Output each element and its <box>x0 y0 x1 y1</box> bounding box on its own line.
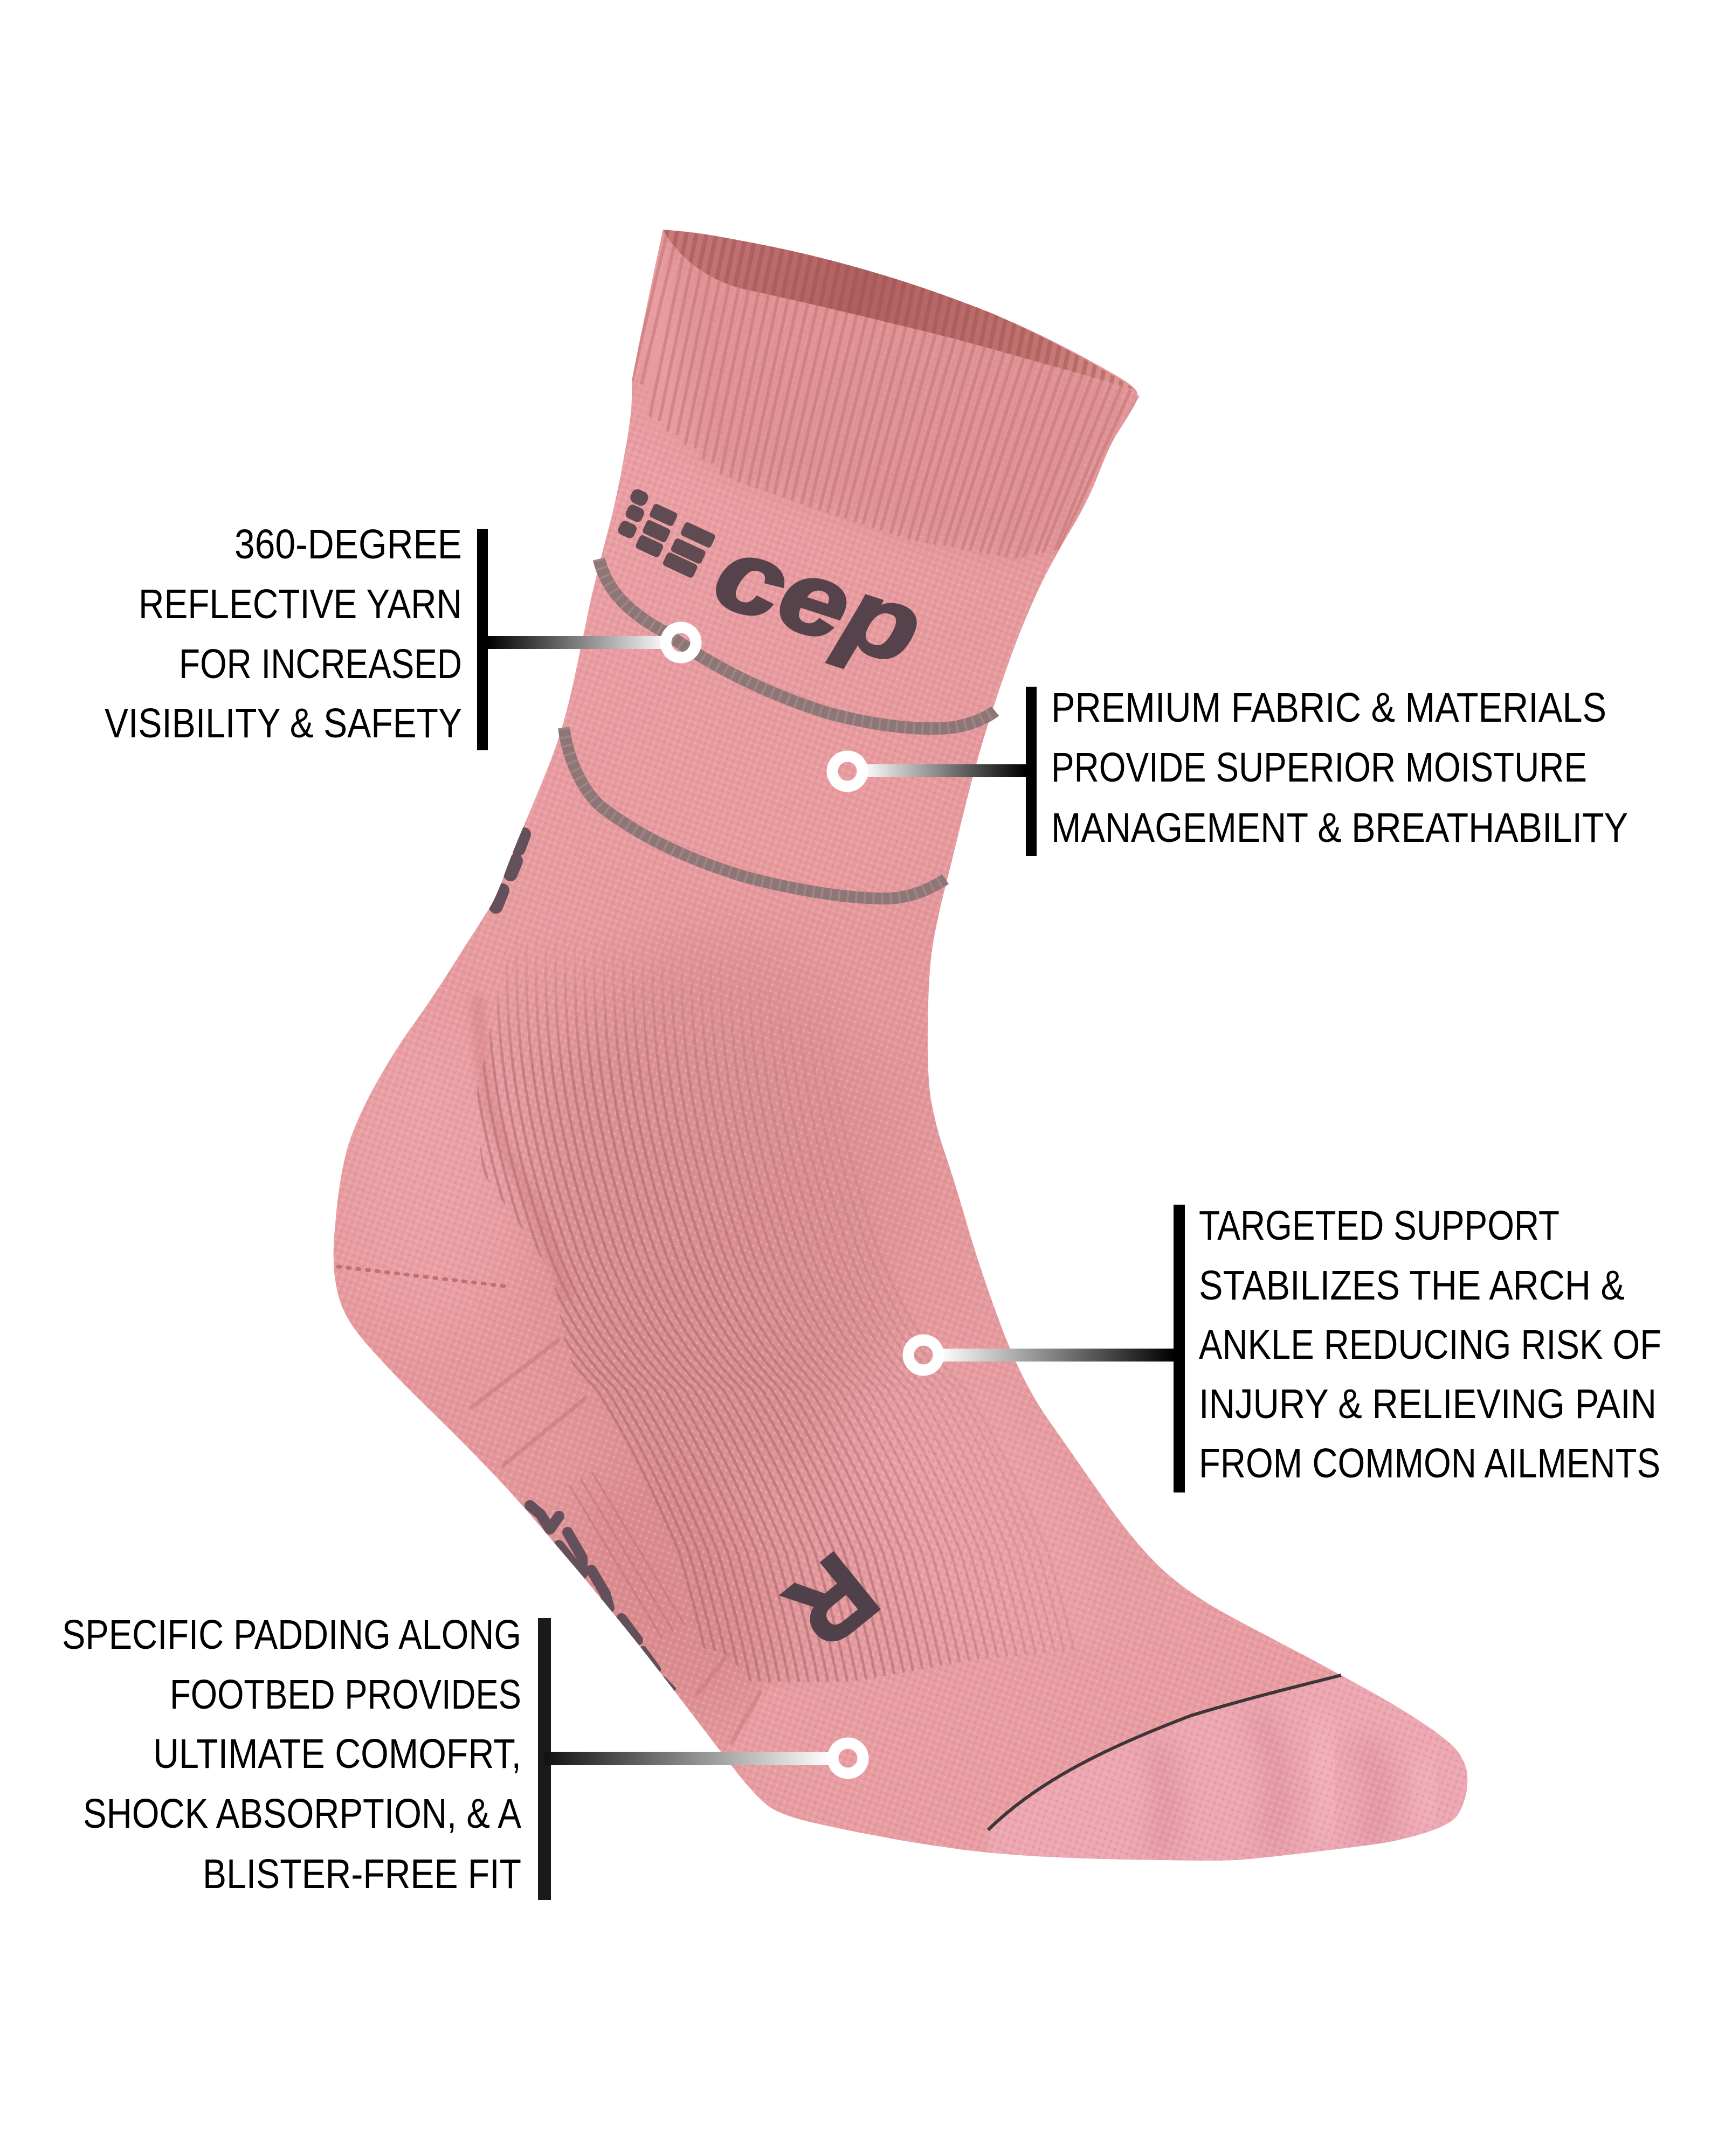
marker ring <box>832 756 862 786</box>
heel seams and sole panels <box>338 1003 760 1743</box>
callout text: footbed padding: ULTIMATE COMOFRT, <box>153 1731 521 1777</box>
callout bar <box>477 529 488 750</box>
callout text: reflective yarn: VISIBILITY & SAFETY <box>105 700 462 747</box>
heel print marks <box>496 834 524 907</box>
brand wordmark: cep <box>702 514 935 687</box>
callout text: footbed padding: FOOTBED PROVIDES <box>170 1671 521 1718</box>
callout text: premium fabric: PROVIDE SUPERIOR MOISTURE <box>1051 744 1587 791</box>
marker ring <box>833 1743 863 1773</box>
reflective band upper <box>599 559 995 729</box>
callout text: premium fabric <box>1051 685 1628 851</box>
cuff tone <box>632 230 1140 559</box>
callout text: reflective yarn: FOR INCREASED <box>179 641 462 687</box>
toe folds <box>1154 1709 1379 1860</box>
connector line <box>862 764 1026 777</box>
product photo: pink compression sock <box>334 226 1509 1887</box>
shin to ankle ribbing <box>458 927 1080 1682</box>
connector line <box>938 1349 1174 1362</box>
knit texture <box>334 230 1467 1861</box>
callout text: footbed padding <box>62 1612 522 1897</box>
toe section <box>988 1676 1467 1861</box>
reflective band lower <box>564 728 946 899</box>
marker ring <box>666 627 696 658</box>
fabric shading and knit structure <box>334 226 1509 1887</box>
callout bar <box>1174 1205 1185 1492</box>
sock body silhouette <box>334 230 1467 1861</box>
callout text: premium fabric: PREMIUM FABRIC & MATERIALS <box>1051 685 1606 731</box>
callout text: targeted support: TARGETED SUPPORT <box>1199 1203 1560 1249</box>
connector line <box>488 636 668 649</box>
callout text: footbed padding: BLISTER-FREE FIT <box>203 1851 521 1897</box>
callout: targeted support <box>908 1203 1661 1492</box>
marker ring <box>908 1340 939 1370</box>
callout text: targeted support: INJURY & RELIEVING PAIN <box>1199 1381 1657 1427</box>
callout text: premium fabric: MANAGEMENT & BREATHABILITY <box>1051 805 1628 851</box>
callout text: targeted support: STABILIZES THE ARCH & <box>1199 1262 1625 1309</box>
callout text: footbed padding: SHOCK ABSORPTION, & A <box>83 1791 522 1837</box>
connector line <box>544 1752 830 1765</box>
callout text: reflective yarn: 360-DEGREE <box>234 521 462 568</box>
callout: premium fabric <box>832 685 1628 856</box>
callout bar <box>538 1618 551 1900</box>
cuff side highlights <box>625 226 695 453</box>
callout: footbed padding <box>62 1612 863 1900</box>
cuff opening interior <box>663 230 1136 390</box>
callout bar <box>1026 687 1037 856</box>
right foot marker: R <box>765 1531 899 1670</box>
sole print marks <box>530 1505 674 1689</box>
callout text: reflective yarn <box>105 521 462 747</box>
forefoot panel <box>728 1595 1341 1854</box>
callout text: targeted support <box>1199 1203 1661 1487</box>
callout text: footbed padding: SPECIFIC PADDING ALONG <box>62 1612 521 1658</box>
toe seam <box>988 1675 1341 1830</box>
callout: reflective yarn <box>105 521 696 750</box>
brand logo dots <box>617 487 716 579</box>
callout text: reflective yarn: REFLECTIVE YARN <box>139 581 462 627</box>
cuff ribbing <box>632 226 1144 562</box>
